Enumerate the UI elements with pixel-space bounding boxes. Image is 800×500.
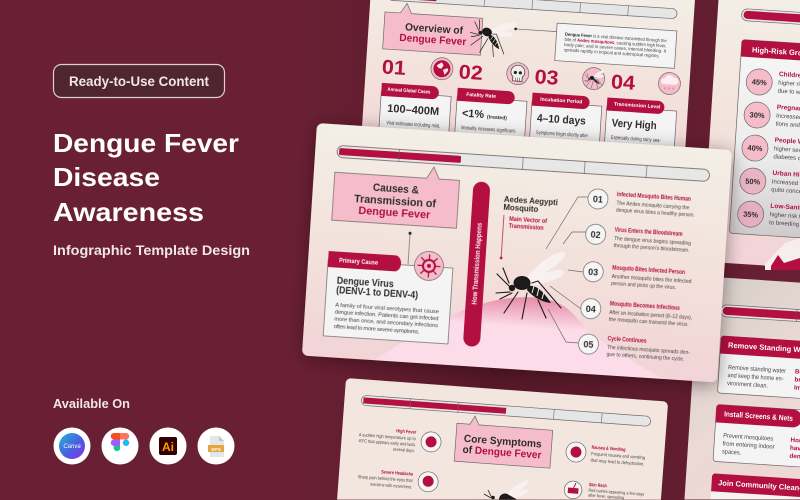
heading: aedes aegypti: Mosquito	[503, 202, 539, 214]
icon: main mosquito	[496, 252, 565, 319]
badge: ready to use: Ready-to-Use Content	[69, 74, 209, 89]
icon: eps file	[198, 428, 234, 464]
card: incubation period: 4–10 days	[537, 113, 586, 128]
step 02	[585, 224, 692, 254]
icon: symptoms mosquito	[484, 480, 529, 500]
progress bar	[741, 9, 800, 32]
step 01	[587, 188, 696, 219]
step 04: the mosquito can transmit the virus.	[609, 317, 689, 328]
step 01: 01	[593, 194, 603, 205]
symptom: high fever	[358, 426, 442, 455]
connector dot line	[407, 232, 412, 264]
card: remove standing water	[717, 336, 800, 404]
step 05	[578, 333, 691, 363]
title: Disease	[53, 162, 160, 192]
numbers: 03	[534, 66, 559, 90]
text block: description: bite of Aedes mosquitoes, causing sudden high fever,	[564, 37, 667, 48]
card: install screens and nets: from entering indoor	[722, 440, 775, 451]
icon: globe	[430, 57, 454, 80]
symptom: severe headache: Sharp pain behind the eyes that	[358, 474, 413, 483]
step 02: 02	[590, 229, 601, 240]
symptom: nausea and vomiting	[565, 441, 646, 467]
text block: description: spreads rapidly in tropical and subtropical regions.	[564, 47, 660, 58]
icon: overview mosquito	[465, 9, 518, 61]
group: urban	[739, 167, 800, 199]
card: fatality rate: Mortality increases significant-	[461, 125, 516, 135]
step 02: through the person's bloodstream.	[613, 243, 690, 254]
card: transmission level: Transmission Level	[614, 101, 661, 111]
step 05: The infectious mosquito spreads den-	[607, 345, 690, 356]
step 03: person and picks up the virus.	[611, 281, 677, 291]
card: primary cause: dengue infection. Patients can get infected	[335, 310, 439, 322]
card: incubation period: a mosquito bite from an infect-	[535, 137, 591, 147]
icon: mosquito	[582, 67, 605, 90]
card: annual global cases: unreported, and confirmed	[386, 127, 436, 136]
panel: causes and transmission slide	[302, 123, 732, 382]
text block: description: body pain, and in severe cases, internal bleeding. It	[564, 42, 667, 54]
progress bar	[337, 145, 710, 182]
icon: illustrator	[150, 428, 186, 464]
callout: main vector	[500, 215, 548, 262]
step 03	[582, 261, 692, 292]
group: people with: 40%	[747, 143, 763, 153]
panel: prevention slide	[684, 276, 800, 500]
icon: canva: Canva	[63, 444, 81, 450]
card: transmission level: Very High	[611, 117, 657, 132]
panel: left cover column	[53, 64, 250, 464]
card: primary cause: more than once, and secondary infections	[334, 317, 438, 329]
card: annual global cases	[377, 83, 452, 158]
card: fatality rate: Fatality Rate	[466, 92, 496, 100]
card: transmission level: Especially during rainy sea-	[611, 135, 661, 144]
step 02: Virus Enters the Bloodstream	[614, 227, 683, 238]
symptom: high fever: several days.	[393, 447, 415, 453]
step 04: Mosquito Becomes Infectious	[610, 300, 680, 312]
progress bar	[387, 0, 677, 19]
card: join community clean-up	[711, 473, 800, 500]
step 05: 05	[583, 339, 594, 350]
icon: illustrator: Ai	[162, 440, 174, 454]
callout: symptoms heading: Core Symptoms	[463, 433, 542, 451]
card: annual global cases: Annual Global Cases	[387, 87, 431, 96]
card: remove standing water: Remove standing water	[728, 364, 786, 375]
callout: overview heading	[383, 2, 483, 55]
group: people with	[741, 134, 800, 165]
card: incubation period: Incubation Period	[540, 97, 582, 105]
step 03: 03	[588, 267, 599, 277]
progress bar	[361, 395, 651, 426]
symptom: high fever: 40°C that appears early and lasts	[358, 438, 416, 447]
card: primary cause: Dengue Virus	[336, 276, 394, 290]
hill	[374, 296, 662, 379]
callout: symptoms heading	[454, 415, 553, 468]
callout: causes heading: Causes &	[373, 182, 419, 197]
group: low sanitation	[737, 200, 800, 231]
card: annual global cases: Viral estimates including mild,	[386, 120, 440, 130]
card: install screens and nets: Prevent mosquitoes	[723, 432, 773, 443]
card: primary cause: (DENV-1 to DENV-4)	[336, 285, 418, 301]
card: fatality rate: <1%	[462, 108, 485, 121]
panel: overview slide	[360, 0, 695, 184]
text block: description	[512, 20, 677, 68]
numbers: 04	[610, 71, 637, 95]
progress bar	[720, 305, 800, 328]
title: Awareness	[53, 197, 204, 227]
card: incubation period: Symptoms begin shortly after	[536, 130, 588, 139]
numbers: 02	[458, 61, 483, 85]
card: primary cause: Primary Cause	[339, 257, 379, 267]
step 05: Cycle Continues	[607, 335, 647, 345]
title	[53, 128, 239, 227]
icon: skull	[506, 62, 529, 85]
callout: symptoms heading: of Dengue Fever	[462, 444, 542, 461]
pill: how transmission happens	[463, 181, 491, 347]
subtitle: Infographic Template Design	[53, 242, 250, 258]
symptom: skin rash: Red rashes appearing a few days	[588, 488, 645, 497]
callout: causes heading: Transmission of	[354, 193, 437, 210]
callout: main vector: Main Vector of	[509, 216, 548, 225]
step 01: dengue virus bites a healthy person.	[616, 208, 695, 219]
card: primary cause: A family of four viral serotypes that cause	[335, 303, 439, 315]
icon: canva	[54, 428, 90, 464]
group: urban: 50%	[745, 177, 761, 187]
symptom: skin rash	[564, 480, 646, 500]
callout: overview heading: Overview of	[405, 21, 464, 37]
step 04: After an incubation period (8–12 days),	[609, 310, 693, 321]
connector lines	[546, 197, 588, 343]
step 01: Infected Mosquito Bites Human	[617, 191, 691, 203]
panel: core symptoms slide	[337, 378, 668, 500]
icon: bottom mound	[765, 238, 800, 270]
symptom: severe headache: worsens with movement.	[370, 482, 412, 490]
symptom: nausea and vomiting: Nausea & Vomiting	[591, 445, 626, 453]
step 03: Another mosquito bites the infected	[611, 274, 692, 285]
icon: virus	[414, 251, 444, 281]
step 02: The dengue virus begins spreading	[614, 236, 691, 247]
group: children	[745, 68, 800, 100]
icon: eps file: EPS	[211, 447, 222, 453]
card: transmission level: sons and in densely populated	[610, 142, 665, 151]
numbers	[381, 56, 637, 95]
badge: ready to use	[54, 64, 224, 98]
card: fatality rate: ly if severe dengue goes with-	[460, 132, 515, 142]
pill: how transmission happens: How Transmission Happens	[472, 222, 484, 305]
card: install screens and nets: spaces.	[722, 448, 742, 457]
card: install screens and nets	[713, 404, 800, 472]
group: pregnant	[743, 101, 800, 133]
step 01: The Aedes mosquito carrying the	[616, 201, 689, 211]
icon: figma	[102, 428, 138, 464]
group: children: 45%	[751, 77, 767, 87]
step 04: 04	[585, 304, 596, 314]
symptom: severe headache: Severe Headache	[381, 469, 414, 478]
symptom: nausea and vomiting: that may lead to dehydration.	[590, 458, 645, 467]
heading: available on: Available On	[53, 396, 130, 411]
group: low sanitation: 35%	[743, 210, 759, 220]
card: annual global cases: 100–400M	[387, 103, 440, 118]
symptom: nausea and vomiting: Frequent nausea and vomiting	[591, 451, 646, 460]
title: Dengue Fever	[53, 128, 239, 158]
callout: main vector: Transmission	[508, 223, 544, 232]
callout: causes heading: Dengue Fever	[358, 205, 431, 222]
card: incubation period	[528, 93, 602, 168]
step 05: gue to others, continuing the cycle.	[606, 352, 685, 363]
callout: causes heading	[332, 161, 460, 228]
step 03: Mosquito Bites Infected Person	[612, 264, 685, 276]
step 04	[580, 298, 693, 328]
callout: overview heading: Dengue Fever	[399, 32, 467, 48]
icon: rain cloud	[658, 72, 681, 95]
card: primary cause	[323, 251, 453, 344]
panel: high-risk groups slide	[701, 0, 800, 274]
card: high-risk groups	[729, 40, 800, 244]
card: fatality rate: (treated)	[487, 114, 507, 122]
group: low sanitation: to breeding	[769, 220, 799, 228]
heading: aedes aegypti	[503, 194, 558, 215]
text block: description: Dengue Fever is a viral disease transmitted through the	[565, 32, 667, 43]
card: remove standing water: and keep the home en-	[727, 372, 784, 383]
symptom: severe headache	[357, 467, 439, 492]
group: pregnant: tions and	[775, 121, 800, 129]
group: pregnant: 30%	[749, 110, 765, 120]
symptom: high fever: A sudden high temperature up to	[359, 432, 416, 441]
card: remove standing water: vironment clean.	[727, 380, 768, 390]
card: transmission level	[603, 98, 677, 173]
symptom: skin rash: Skin Rash	[589, 482, 607, 489]
symptom: high fever: High Fever	[396, 428, 416, 436]
numbers: 01	[381, 56, 407, 80]
heading: aedes aegypti: Aedes Aegypti	[504, 194, 558, 207]
card: fatality rate	[453, 88, 528, 163]
card: primary cause: often lead to more severe symptoms.	[334, 324, 420, 336]
